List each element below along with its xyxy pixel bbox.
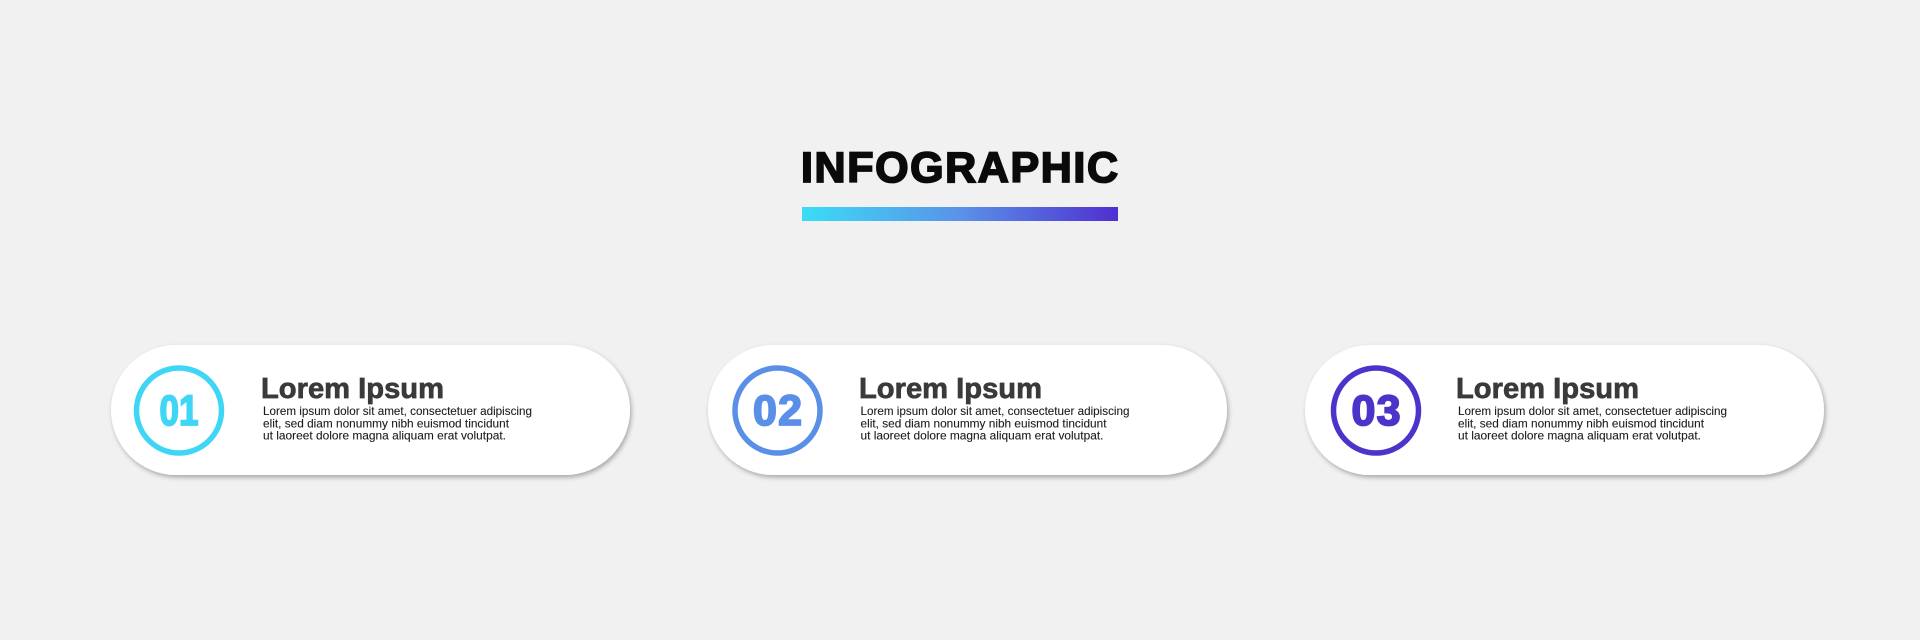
number badge 02: 02 xyxy=(753,387,802,435)
number badge 02 xyxy=(735,368,820,453)
number badge 01: 01 xyxy=(160,387,198,435)
panel: step 02 xyxy=(708,345,1227,475)
heading 02: Lorem Ipsum xyxy=(859,373,1042,405)
number badge 01 xyxy=(136,368,222,453)
body text 02: ut laoreet dolore magna aliquam erat volutpat. xyxy=(860,429,1104,443)
body text 02 xyxy=(860,404,1130,443)
body text 02: elit, sed diam nonummy nibh euismod tincidunt xyxy=(860,416,1107,430)
body text 02: Lorem ipsum dolor sit amet, consectetuer adipiscing xyxy=(860,404,1130,418)
body text 01 xyxy=(263,404,532,443)
body text 03: ut laoreet dolore magna aliquam erat volutpat. xyxy=(1458,429,1701,443)
pill card 03 xyxy=(1305,345,1824,475)
body text 01: ut laoreet dolore magna aliquam erat volutpat. xyxy=(263,429,506,443)
heading 01: Lorem Ipsum xyxy=(261,373,444,405)
pill card 02 xyxy=(708,345,1227,475)
pill card 01 xyxy=(111,345,630,475)
body text 03: Lorem ipsum dolor sit amet, consectetuer adipiscing xyxy=(1458,404,1727,418)
body text 03: elit, sed diam nonummy nibh euismod tincidunt xyxy=(1458,416,1705,430)
body text 03 xyxy=(1458,404,1727,443)
panel: step 01 xyxy=(111,345,630,475)
body text 01: elit, sed diam nonummy nibh euismod tincidunt xyxy=(263,416,510,430)
panel: step 03 xyxy=(1305,345,1824,475)
title: INFOGRAPHIC xyxy=(801,144,1118,192)
body text 01: Lorem ipsum dolor sit amet, consectetuer adipiscing xyxy=(263,404,532,418)
number badge 03: 03 xyxy=(1352,387,1400,435)
title gradient bar xyxy=(802,207,1118,221)
number badge 03 xyxy=(1334,368,1418,453)
heading 03: Lorem Ipsum xyxy=(1456,373,1639,405)
